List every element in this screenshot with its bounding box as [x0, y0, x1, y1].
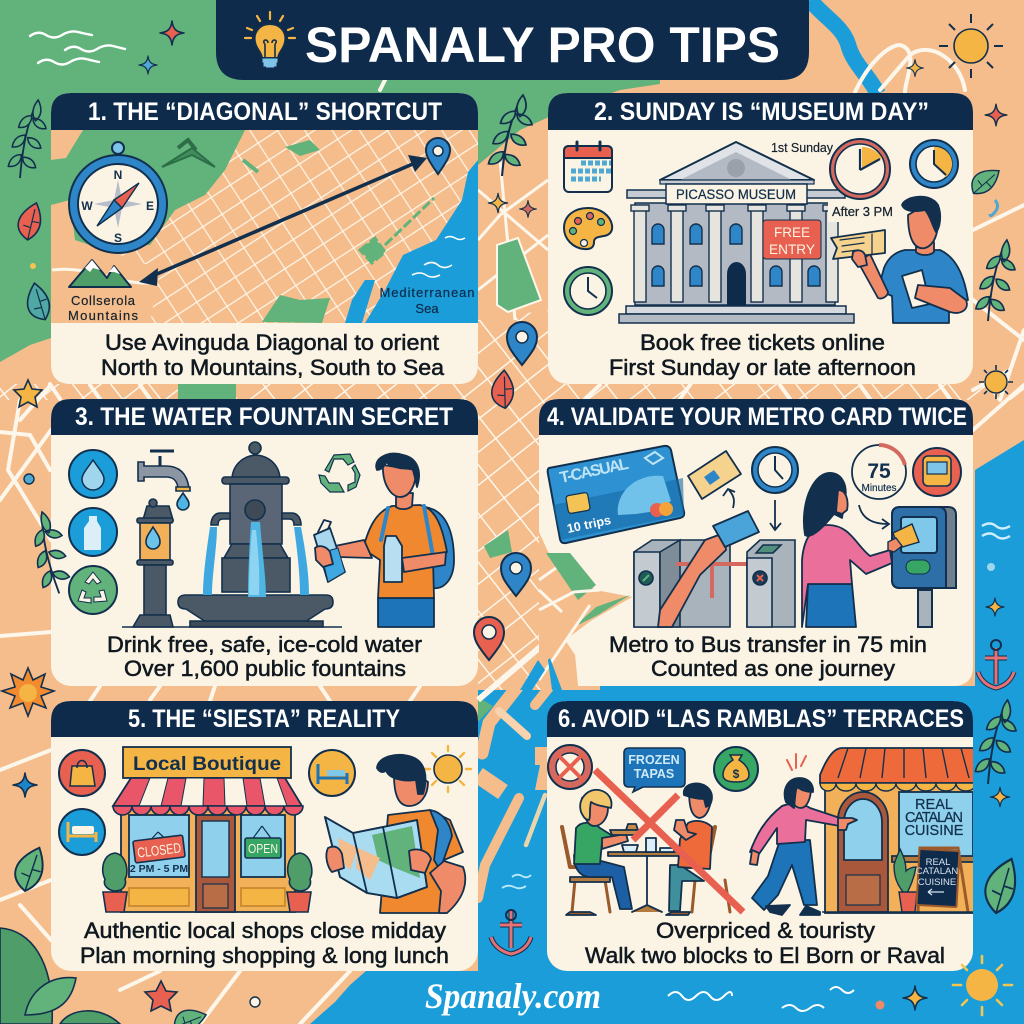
illustration: boutique [113, 747, 303, 912]
caption 1 [101, 330, 445, 380]
title text: SPANALY PRO TIPS [305, 17, 780, 73]
sign board [916, 848, 968, 912]
icon: blue clock [752, 447, 798, 493]
caption 5 [80, 918, 449, 968]
header 2 [548, 93, 973, 130]
bubble: frozen tapas: FROZEN [628, 753, 680, 767]
sign: open [245, 838, 281, 858]
icon: compass: S [114, 231, 122, 245]
caption 2: First Sunday or late afternoon [609, 355, 916, 380]
caption 5: Authentic local shops close midday [84, 918, 446, 943]
icon: 75 minutes: 75 [867, 460, 891, 483]
panel: 1 diagonal shortcut [51, 93, 478, 384]
header 5: 5. THE “SIESTA” REALITY [128, 705, 400, 733]
icon: plant pots [103, 853, 312, 912]
panel: 6 las ramblas [547, 701, 976, 971]
leaf branch [14, 509, 84, 599]
title banner [216, 0, 809, 80]
icon: map pin [426, 138, 450, 174]
illustration: seated diners [562, 783, 730, 915]
decorations: bottom [0, 928, 1012, 1024]
header 4 [539, 399, 973, 435]
arrow to validator [859, 505, 889, 529]
icon: small fountain [133, 499, 173, 627]
large leaves [0, 928, 52, 1024]
caption 1: Use Avinguda Diagonal to orient [105, 330, 439, 355]
arrow down [770, 500, 781, 530]
icon: compass: E [146, 199, 154, 213]
icon: calendar [564, 142, 612, 192]
sign board: REAL [926, 857, 950, 868]
map illustration [51, 130, 478, 323]
label: After 3 PM: After 3 PM [832, 204, 893, 219]
icon: plant [894, 849, 917, 912]
illustration: gate left [634, 540, 765, 627]
icon: blue clock [910, 140, 958, 188]
icon: recycle [319, 454, 360, 492]
sign board: CUISINE [918, 877, 956, 888]
icon: bag [59, 750, 105, 796]
label: window sign: CUISINE [905, 823, 964, 839]
waves [30, 31, 125, 64]
icon: ticket [688, 451, 741, 499]
water jets [203, 522, 309, 597]
icon: light bulb [245, 12, 295, 67]
sign board: CATALAN [916, 866, 958, 877]
caption 4 [609, 632, 927, 681]
label: Mediterranean Sea [380, 285, 474, 316]
label: window sign: REAL [915, 797, 953, 813]
decorations: left margin top [2, 21, 184, 891]
header 5 [51, 701, 478, 737]
label: Mediterranean Sea: Mediterranean [380, 285, 474, 300]
icon: bus [913, 448, 961, 496]
header 2: 2. SUNDAY IS “MUSEUM DAY” [594, 98, 929, 126]
caption 6: Walk two blocks to El Born or Raval [585, 943, 945, 968]
icon: recycle circle [69, 566, 117, 614]
label: After 3 PM [828, 200, 896, 222]
ground line [122, 626, 342, 628]
icon: bed blue [59, 809, 105, 855]
label: window sign [905, 797, 964, 839]
pin blue mid [501, 553, 531, 596]
icon: water drop circle [69, 450, 117, 498]
caption 6 [585, 918, 945, 968]
icon: bottle circle [69, 508, 117, 556]
sign: closed: CLOSED [136, 839, 182, 861]
ground line [822, 911, 973, 913]
illustration: museum building: PICASSO MUSEUM [676, 187, 796, 202]
illustration: person with ticket [831, 197, 968, 323]
label: Collserola Mountains [68, 293, 138, 323]
anchor right [978, 648, 1014, 688]
brand: Spanaly.com: Spanaly.com [425, 976, 601, 1016]
caption 4: Counted as one journey [651, 656, 895, 681]
header 6: 6. AVOID “LAS RAMBLAS” TERRACES [558, 705, 964, 733]
arrow up [723, 489, 735, 508]
panel: 4 metro card [520, 399, 973, 690]
label: Collserola Mountains: Collserola [71, 293, 136, 308]
free entry sign: ENTRY [769, 241, 816, 257]
bubble: frozen tapas: TAPAS [634, 767, 674, 781]
icon: compass: W [81, 199, 93, 213]
decorations: right margin [907, 14, 1016, 913]
waves [502, 875, 531, 888]
header 1: 1. THE “DIAGONAL” SHORTCUT [88, 98, 442, 126]
caption 2: Book free tickets online [640, 330, 885, 355]
label: local boutique: Local Boutique [133, 754, 281, 775]
panel: 5 siesta [51, 701, 478, 971]
free entry sign [763, 220, 821, 259]
label: Collserola Mountains: Mountains [68, 308, 138, 323]
icon: faucet [138, 451, 190, 510]
icon: money bag [714, 747, 758, 791]
header 6 [547, 701, 973, 737]
sign: open: OPEN [248, 841, 278, 856]
leaf red [485, 369, 519, 411]
icon: sun [425, 746, 471, 792]
illustration: person with bottles [314, 453, 454, 627]
sign: closed: 2 PM - 5 PM [130, 863, 188, 875]
caption 6: Overpriced & touristy [656, 918, 875, 943]
header 3: 3. THE WATER FOUNTAIN SECRET [75, 403, 453, 431]
icon: compass: N [114, 168, 122, 182]
header 4: 4. VALIDATE YOUR METRO CARD TWICE [547, 403, 967, 431]
sun top right [954, 29, 988, 63]
icon: palette [564, 208, 612, 249]
icon: prohibited plate [548, 745, 592, 789]
illustration: woman at validator [802, 473, 892, 627]
illustration: museum building [619, 142, 854, 323]
caption 5: Plan morning shopping & long lunch [80, 943, 449, 968]
illustration: restaurant [820, 748, 976, 913]
anchor [491, 911, 531, 954]
label: Mediterranean Sea: Sea [415, 301, 439, 316]
orange sun star [2, 668, 54, 716]
pin blue top [507, 322, 537, 365]
free entry sign: FREE [774, 224, 810, 240]
illustration: validator [888, 507, 956, 627]
icon: 75 minutes: Minutes [861, 483, 897, 494]
label: window sign: CATALAN [905, 810, 963, 826]
illustration: woman pointing [750, 778, 857, 915]
arrow: diagonal [139, 155, 427, 286]
caption 2 [609, 330, 916, 380]
icon: T-casual card: 10 trips [566, 513, 612, 536]
mark: attention lines [787, 754, 806, 770]
harbour piers [478, 680, 555, 898]
label: 1st Sunday: 1st Sunday [771, 141, 834, 155]
icon: 75 minutes [852, 445, 906, 499]
caption 3 [107, 632, 422, 681]
lower-left [13, 773, 37, 797]
pin red [474, 617, 504, 660]
illustration: gate right [747, 540, 795, 627]
bubble: frozen tapas [624, 748, 685, 792]
sign: closed [130, 835, 188, 875]
illustration: arm with card [658, 511, 759, 627]
illustration: main fountain [178, 442, 333, 627]
header 1 [51, 93, 478, 130]
icon: red clock [830, 139, 890, 199]
icon: bed gold [309, 750, 355, 796]
caption 4: Metro to Bus transfer in 75 min [609, 632, 927, 657]
star [14, 380, 42, 407]
waves [668, 987, 854, 1011]
icon: T-casual card [548, 446, 684, 543]
sun [966, 969, 998, 1001]
decorations: centre column [474, 95, 537, 954]
panel: 2 museum day [548, 93, 973, 384]
icon: T-casual card: T-CASUAL [558, 456, 631, 487]
icon: mountains [69, 260, 131, 287]
icon: forest mountain [162, 140, 215, 167]
mark: red cross [595, 770, 743, 912]
icon: money bag: $ [733, 767, 740, 781]
caption 3: Drink free, safe, ice-cold water [107, 632, 422, 657]
panel: 3 water fountain [51, 399, 478, 686]
illustration: traveller with map [325, 755, 465, 913]
caption 1: North to Mountains, South to Sea [101, 355, 445, 380]
map corner in panel 4 [520, 532, 632, 690]
small sun [985, 371, 1007, 393]
icon: compass [69, 142, 167, 253]
blue dot [24, 474, 34, 484]
icon: green clock [564, 267, 612, 315]
caption 3: Over 1,600 public fountains [124, 656, 406, 681]
